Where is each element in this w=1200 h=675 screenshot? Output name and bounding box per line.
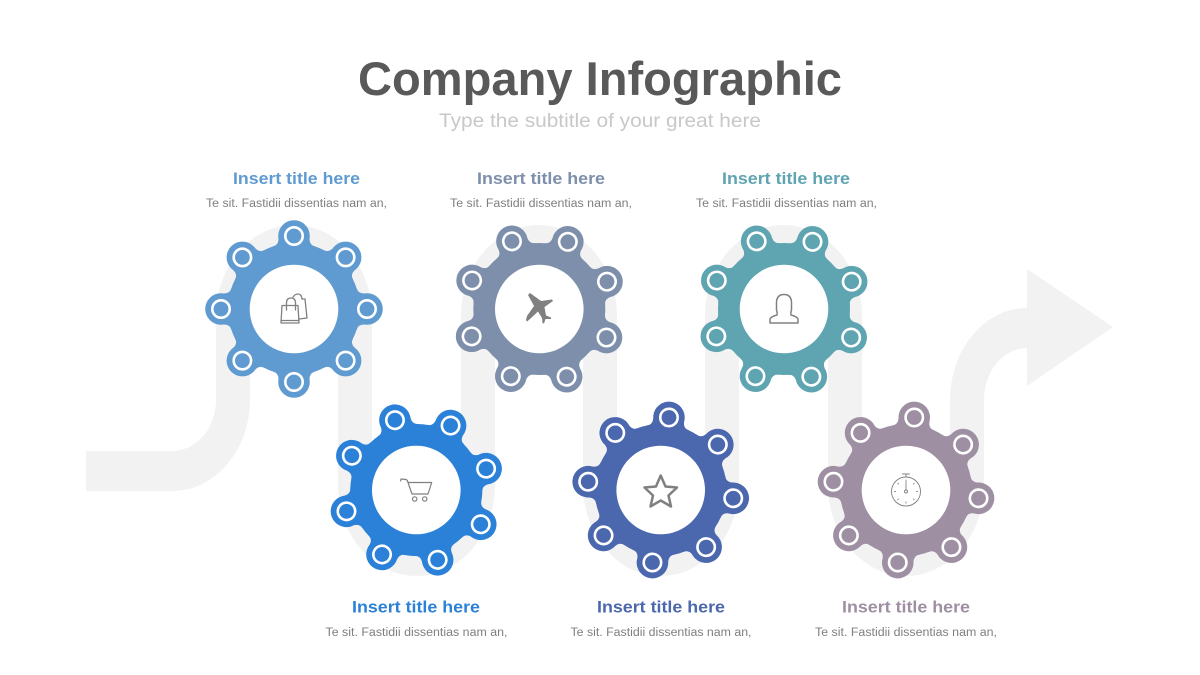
step 6 heading: Insert title here — [842, 598, 970, 616]
icon: airplane — [526, 293, 553, 324]
step 4 description: Te sit. Fastidii dissentias nam an, — [326, 627, 508, 639]
gear 4: bright blue with cart — [296, 370, 536, 610]
step 2 description: Te sit. Fastidii dissentias nam an, — [450, 198, 632, 210]
gear 2: slate with airplane — [423, 193, 656, 425]
winding arrow path — [86, 225, 1113, 576]
subtitle: Type the subtitle of your great here — [439, 110, 761, 132]
step 3 heading: Insert title here — [722, 170, 850, 188]
step 4 heading: Insert title here — [352, 598, 480, 616]
step 3 description: Te sit. Fastidii dissentias nam an, — [696, 198, 877, 210]
step 5 description: Te sit. Fastidii dissentias nam an, — [570, 627, 752, 639]
gear 1: blue with shopping bags — [205, 220, 383, 398]
icon: star — [644, 476, 677, 506]
step 6 description: Te sit. Fastidii dissentias nam an, — [815, 627, 997, 639]
step 1 description: Te sit. Fastidii dissentias nam an, — [206, 198, 387, 210]
step 2 heading: Insert title here — [477, 170, 605, 188]
step 5 heading: Insert title here — [597, 598, 725, 616]
step 1 heading: Insert title here — [233, 170, 360, 188]
title: Company Infographic — [358, 52, 842, 105]
gear 6: mauve with stopwatch — [808, 392, 1004, 588]
icon: person — [770, 294, 798, 323]
gear 5: indigo with star — [562, 392, 759, 588]
icon: shopping bags — [281, 294, 307, 323]
gear 3: teal with person — [668, 193, 900, 425]
icon: shopping cart — [401, 479, 432, 501]
icon: stopwatch — [892, 474, 920, 506]
